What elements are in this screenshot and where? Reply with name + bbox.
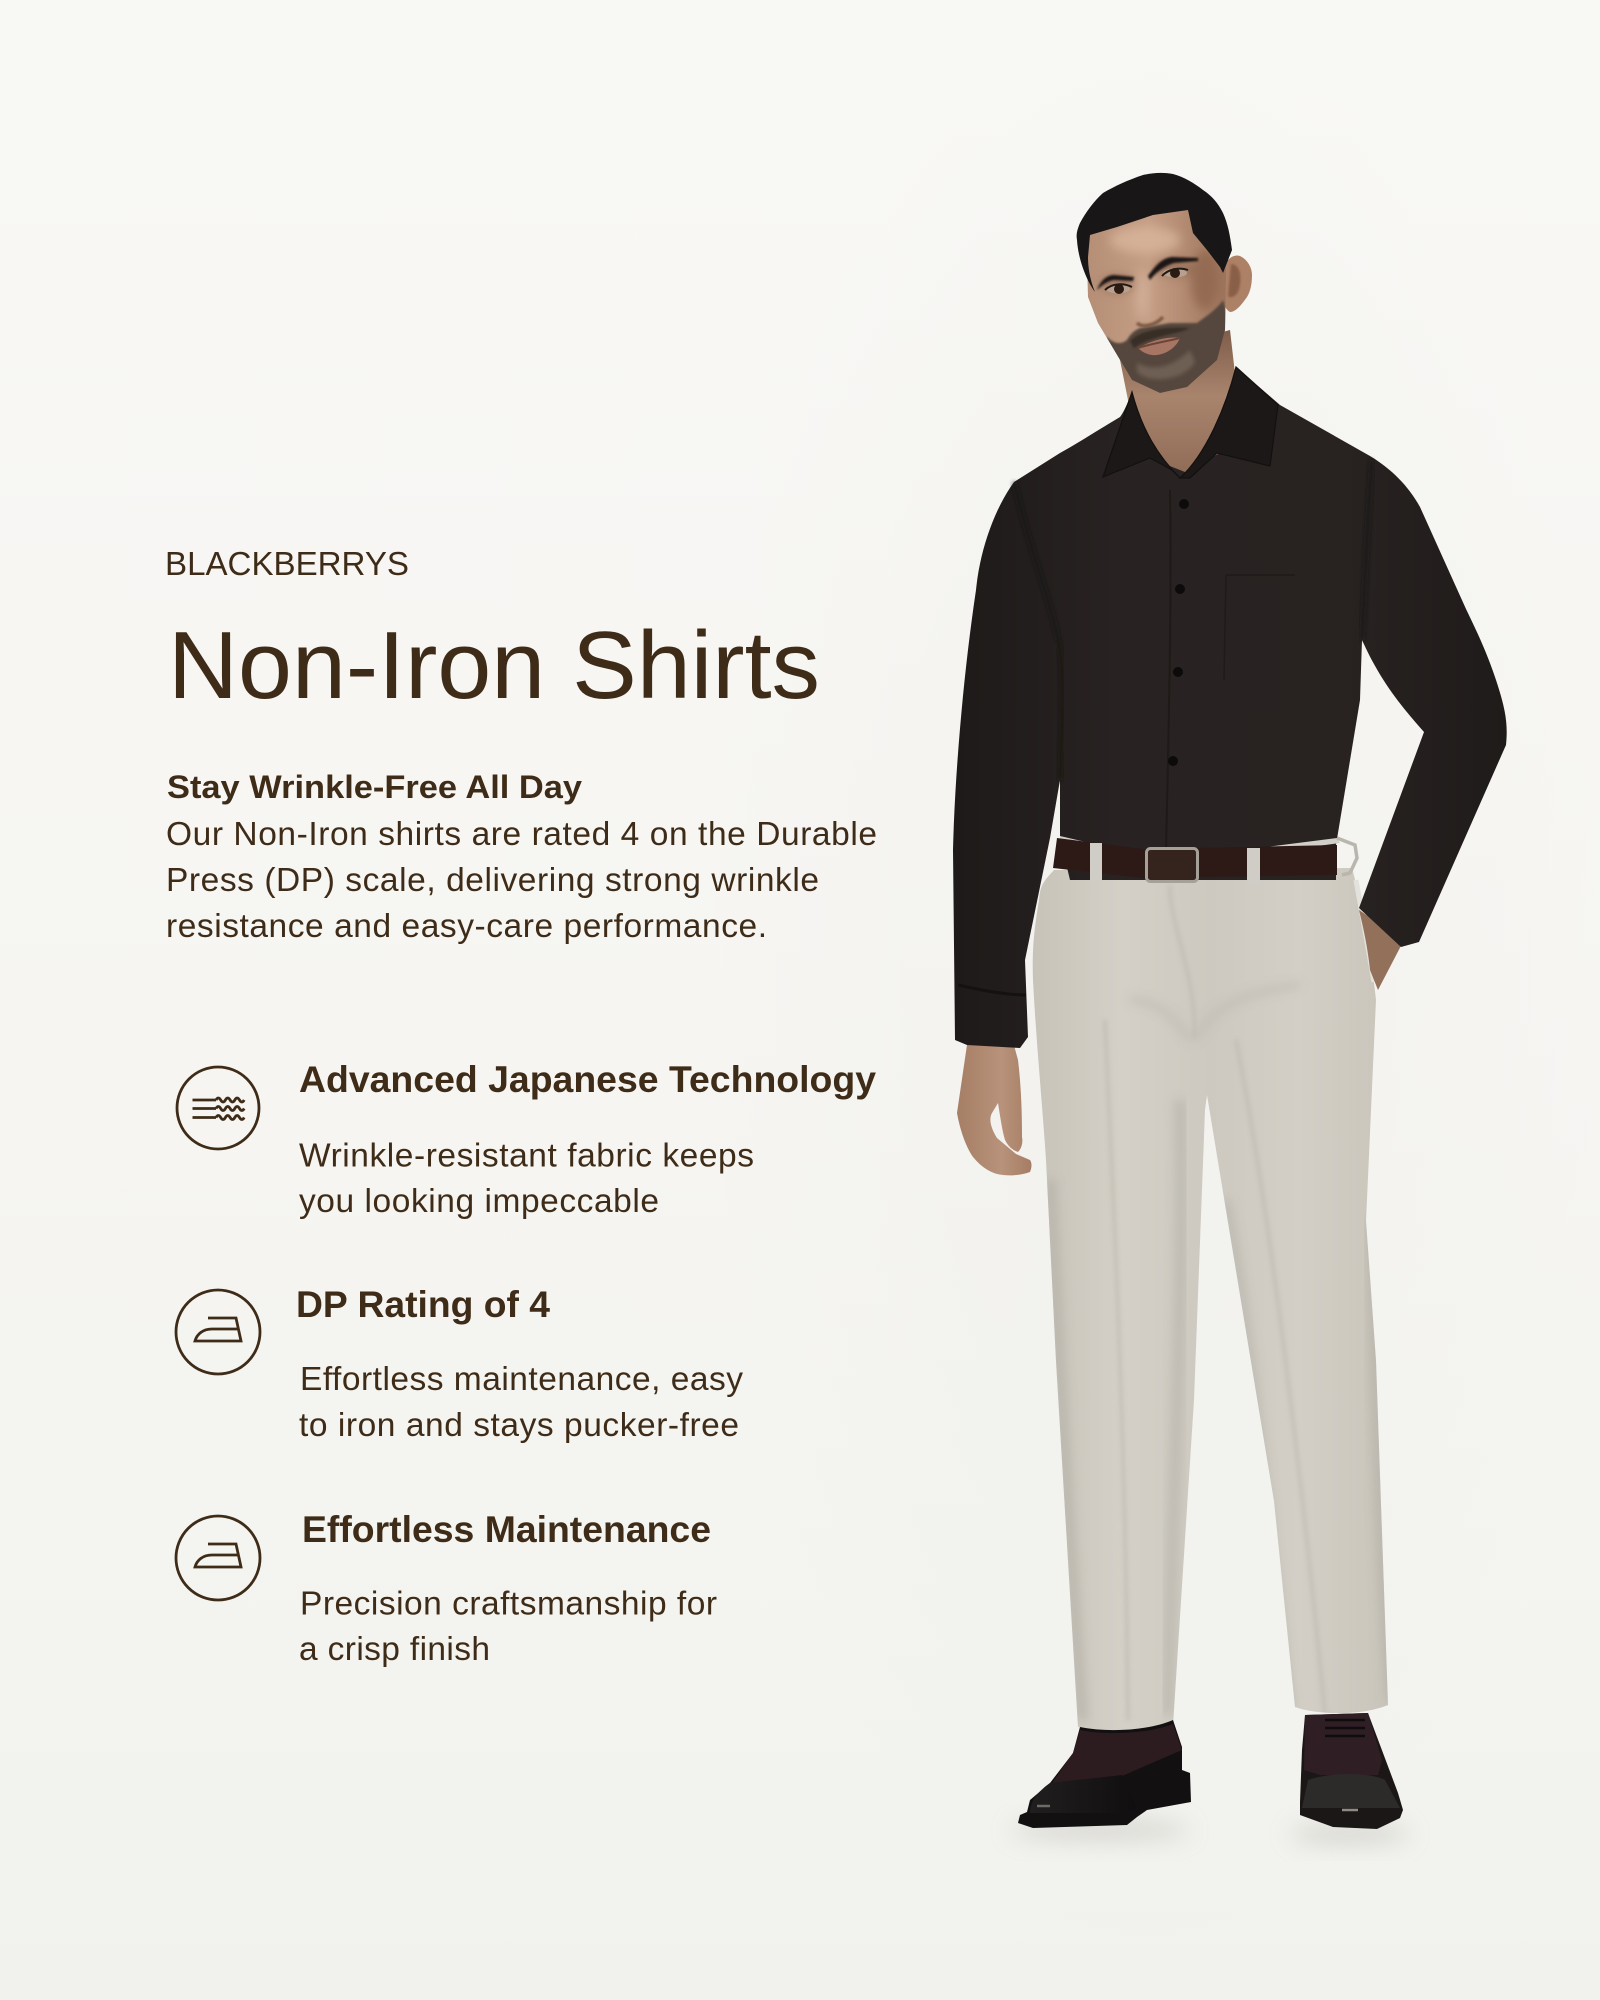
shirt folds <box>958 460 1372 995</box>
ear <box>1223 255 1252 312</box>
chest pocket <box>1224 575 1295 680</box>
description: a crisp finish <box>299 1631 490 1668</box>
hair <box>1077 173 1232 292</box>
floor shadow <box>1010 1821 1410 1843</box>
lips <box>1138 338 1180 355</box>
head <box>1077 173 1252 400</box>
icon: iron <box>176 1290 260 1374</box>
left shoe <box>1018 1720 1191 1828</box>
feature: Effortless Maintenance <box>176 1509 717 1668</box>
trousers <box>1033 868 1392 1731</box>
feature: Advanced Japanese Technology <box>177 1059 876 1220</box>
shirt collar <box>1103 367 1278 478</box>
intro body: Our Non-Iron shirts are rated 4 on the Durable <box>166 816 877 853</box>
waistband <box>1060 836 1340 854</box>
intro text block <box>166 769 877 945</box>
title: Non-Iron Shirts <box>168 612 820 719</box>
description <box>299 1361 743 1444</box>
trouser creases and shading <box>1050 885 1392 1720</box>
intro subheading: Stay Wrinkle-Free All Day <box>167 769 582 805</box>
description: Effortless maintenance, easy <box>300 1361 743 1398</box>
belt buckle <box>1146 848 1198 882</box>
heading: Effortless Maintenance <box>302 1509 711 1550</box>
feature: DP Rating of 4 <box>176 1284 743 1444</box>
strap <box>1053 838 1337 878</box>
D ring <box>1337 838 1357 875</box>
brand label: BLACKBERRYS <box>165 545 409 582</box>
belt <box>1053 836 1357 885</box>
icon: iron <box>176 1516 260 1600</box>
face shading and beard <box>1100 227 1232 400</box>
right shoe <box>1300 1713 1403 1829</box>
right hand in pocket <box>1359 910 1404 990</box>
model photo illustration <box>953 173 1507 1843</box>
description <box>299 1138 754 1220</box>
description: to iron and stays pucker-free <box>299 1407 739 1444</box>
nose shadow <box>1137 317 1163 326</box>
left hand <box>957 1038 1032 1175</box>
shirt body and sleeves <box>953 367 1507 1048</box>
shirt buttons <box>1168 499 1189 766</box>
eyebrows <box>1097 257 1198 290</box>
icon: fabric waves <box>177 1067 259 1149</box>
description: you looking impeccable <box>299 1183 659 1220</box>
description: Precision craftsmanship for <box>300 1586 717 1622</box>
shoes <box>1018 1713 1403 1829</box>
intro body <box>166 816 877 945</box>
heading: Advanced Japanese Technology <box>299 1059 876 1100</box>
description <box>299 1586 717 1668</box>
belt loops <box>1090 843 1260 885</box>
heading: DP Rating of 4 <box>296 1284 550 1325</box>
description: Wrinkle-resistant fabric keeps <box>299 1138 754 1174</box>
intro body: Press (DP) scale, delivering strong wrinkle <box>166 862 819 899</box>
face <box>1086 200 1226 393</box>
intro body: resistance and easy-care performance. <box>166 908 767 945</box>
eyes <box>1105 268 1188 294</box>
neck <box>1120 330 1238 478</box>
